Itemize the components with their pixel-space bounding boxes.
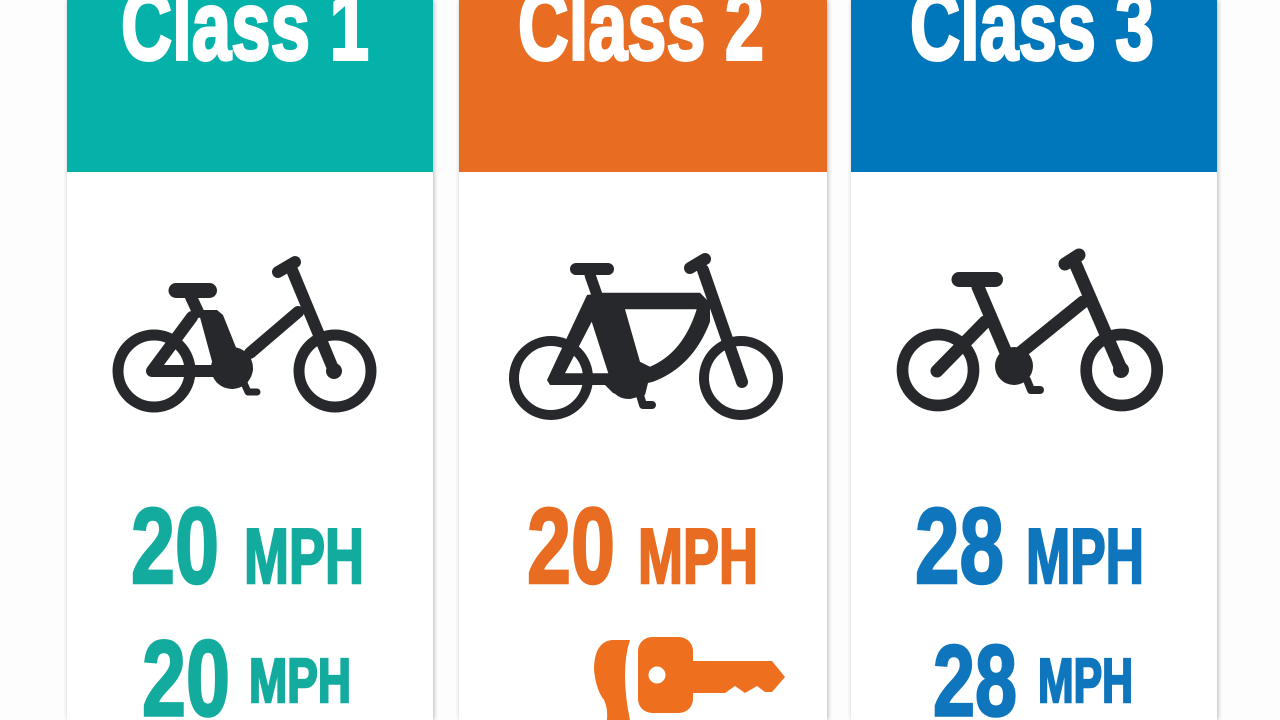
speed: 20 MPH: MPH xyxy=(244,512,364,600)
header: Class 1 xyxy=(67,0,433,172)
panel: Class 1 xyxy=(67,0,433,720)
speed: 20 MPH: 20 xyxy=(131,485,219,606)
speed: second 28 MPH: MPH xyxy=(1038,647,1133,716)
speed: 28 MPH xyxy=(915,485,1144,606)
speed: 28 MPH: 28 xyxy=(915,485,1004,606)
header: Class 2 xyxy=(459,0,827,172)
speed: second 20 MPH xyxy=(142,618,351,720)
icon: key xyxy=(594,637,785,720)
speed: 20 MPH xyxy=(527,485,758,606)
icon: Class 3 e-bike with hub motor xyxy=(902,255,1157,406)
speed: 20 MPH xyxy=(131,485,364,606)
speed: second 20 MPH: MPH xyxy=(249,647,351,716)
icon: Class 1 e-bike with mid battery xyxy=(118,262,371,407)
panel: Class 2 xyxy=(459,0,827,720)
panel: Class 3 xyxy=(851,0,1217,720)
speed: 20 MPH: MPH xyxy=(638,512,758,600)
icon: Class 2 e-bike with throttle frame xyxy=(514,259,778,415)
header: Class 3 xyxy=(851,0,1217,172)
speed: 20 MPH: 20 xyxy=(527,485,615,606)
speed: second 28 MPH xyxy=(933,626,1133,720)
speed: 28 MPH: MPH xyxy=(1026,512,1144,600)
